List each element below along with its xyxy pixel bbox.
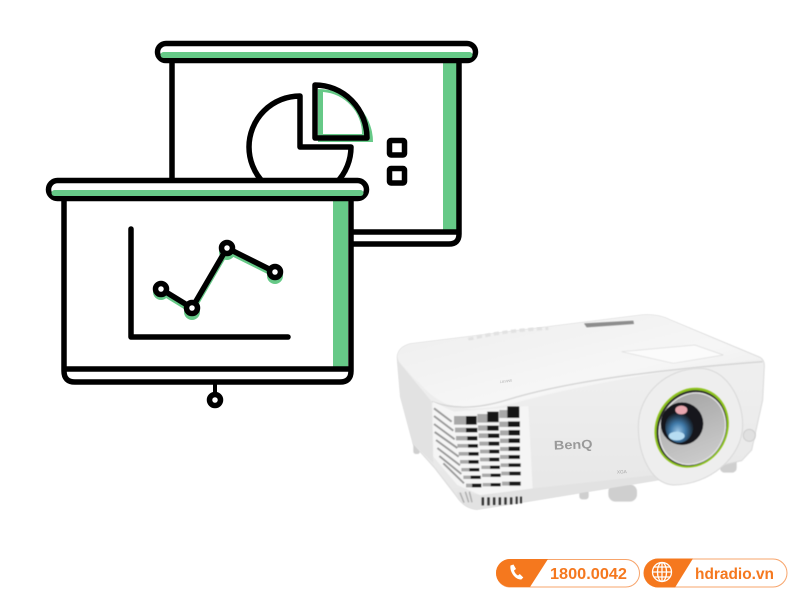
phone number: 1800.0042 [550,566,627,583]
back screen top roller [158,44,476,60]
lower vent slots [482,497,522,505]
screen pull cord [210,383,220,406]
lens barrel [661,402,703,445]
footer: phone pill [496,559,640,587]
lens glare [675,406,687,414]
illustration: back projection screen with pie chart [158,44,476,245]
back screen green shade [443,60,457,231]
lens assembly [641,375,743,481]
legend squares [390,140,404,183]
back screen panel [172,60,459,245]
lens bezel [638,368,743,485]
icon: globe [652,562,672,582]
website pill outline [644,559,787,587]
pie chart main segment [249,96,351,198]
axes [131,229,288,337]
adjustment feet [413,440,737,502]
front screen panel [64,198,351,383]
projector body [397,315,764,509]
pie chart wedge [315,85,373,142]
phone pill orange tab [496,559,548,587]
back screen frame [172,60,459,244]
BenQ logo: BenQ [554,437,593,453]
XGA label: XGA [617,469,628,475]
illustration: front projection screen with line chart [48,180,366,406]
phone pill outline [496,560,640,587]
website address: hdradio.vn [695,566,774,583]
line chart shadow [153,244,283,320]
top panel detail [622,345,723,363]
footer: website pill [644,558,787,588]
smart label: SMART [499,378,513,384]
focus button [743,429,755,441]
front screen frame [64,198,351,382]
bottom base strip [457,475,657,509]
front screen green shade [333,199,348,367]
lens glass [665,411,693,443]
projector top surface [397,315,762,409]
left side shade [397,360,433,463]
line chart [156,242,280,314]
dark ring [643,378,740,478]
control buttons [468,328,548,339]
icon: phone [510,564,523,580]
projector photo [397,315,764,509]
silver ring [647,381,738,476]
front screen top roller [48,180,366,198]
brand mark on top [584,321,634,327]
top edge highlight [432,362,763,407]
green ring [641,375,743,481]
website pill orange tab [644,558,693,588]
vent grille [433,402,533,505]
